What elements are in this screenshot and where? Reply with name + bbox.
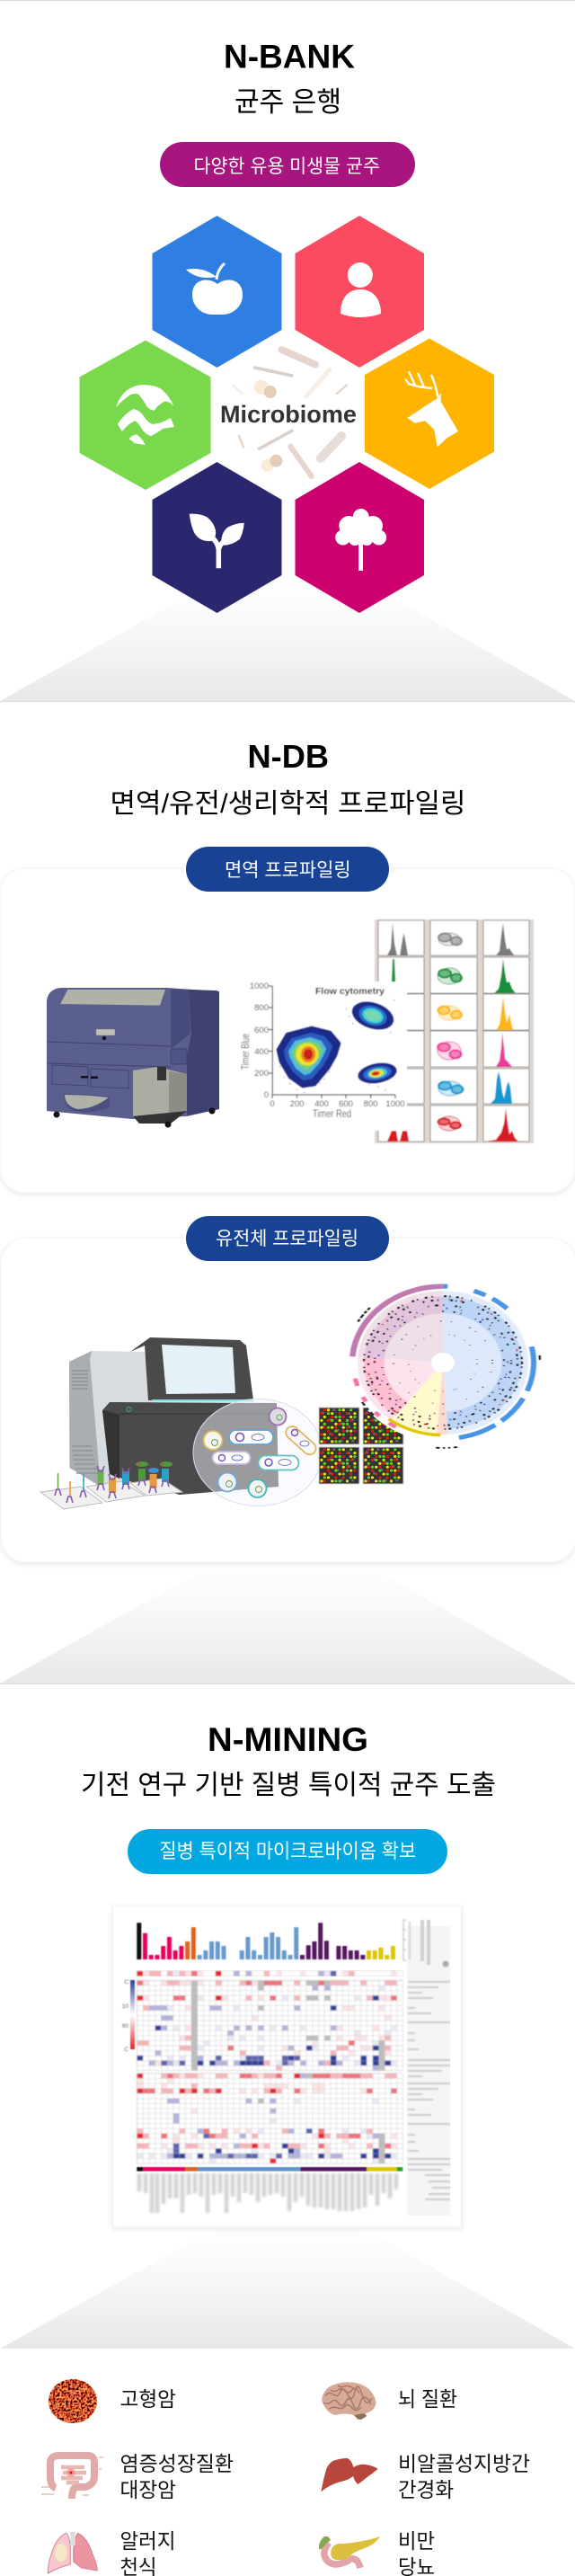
chart: histogram and contour panels	[375, 919, 534, 1143]
hexagon: animal, deer icon	[365, 338, 494, 489]
legend: colour scale: C	[124, 1979, 128, 1985]
icon: brain	[322, 2382, 376, 2420]
illustration: flow cytometer instrument	[47, 988, 219, 1127]
label: obesity, diabetes	[398, 2529, 435, 2576]
icon: intestine	[41, 2452, 103, 2499]
chart: top annotation row	[137, 1971, 402, 1976]
hexagon: forest, tree icon	[295, 462, 424, 613]
chart: flow cytometry scatter plot: Timer Red	[313, 1109, 351, 1120]
label: solid cancer: 고형암	[120, 2387, 176, 2411]
pill: disease specific microbiome	[128, 1829, 447, 1874]
hexagon: food, apple icon	[153, 216, 282, 368]
funnel: N-BANK to N-DB	[0, 580, 575, 702]
card background	[0, 868, 575, 1193]
chart: flow cytometry scatter plot: 1000	[385, 1099, 405, 1109]
top rule	[0, 0, 575, 1]
pill: disease specific microbiome: 질병 특이적 마이크로바이옴 확보	[160, 1840, 416, 1862]
icon: pancreas	[319, 2536, 381, 2568]
label: IBD, colon cancer: 대장암	[120, 2478, 176, 2501]
chart: flow cytometry scatter plot: 400	[314, 1099, 329, 1109]
label: brain disease: 뇌 질환	[398, 2387, 457, 2411]
chart: flow cytometry scatter plot: 600	[254, 1026, 269, 1035]
panel: genome profiling card	[0, 1216, 575, 1684]
panel: N-DB section header	[110, 738, 465, 819]
chart: flow cytometry scatter plot: Flow cytometry	[315, 986, 385, 997]
icon: liver	[321, 2458, 378, 2492]
legend: colour scale: 10	[122, 2003, 128, 2010]
chart: heatmap upper	[137, 1980, 402, 2071]
subheading: strain bank: 균주 은행	[234, 86, 341, 118]
chart: microbe abundance bars	[139, 1923, 393, 1959]
label: IBD, colon cancer: 염증성장질환	[120, 2452, 234, 2475]
pill: immune profiling	[186, 847, 389, 892]
chart: flow cytometry scatter plot: 600	[339, 1099, 353, 1109]
funnel: N-MINING to disease list	[0, 2227, 575, 2349]
label: IBD, colon cancer	[120, 2452, 234, 2501]
label: allergy, asthma	[120, 2529, 176, 2576]
subheading: profiling: 면역/유전/생리학적 프로파일링	[110, 789, 465, 819]
heading: N-MINING: N-MINING	[208, 1721, 368, 1758]
legend: colour scale: 90	[122, 2023, 128, 2030]
panel: N-BANK section	[0, 38, 575, 702]
funnel: N-DB to N-MINING	[0, 1562, 575, 1684]
chart: microarray chips	[319, 1408, 403, 1484]
chart: flow cytometry scatter plot: 0	[270, 1099, 275, 1109]
label: obesity, diabetes: 비만	[398, 2529, 435, 2553]
hexagon: water, waves icon	[79, 341, 210, 490]
chart: side label column	[407, 1926, 450, 2216]
panel: immune profiling card	[0, 847, 575, 1193]
label: NAFLD, cirrhosis: 간경화	[398, 2478, 454, 2501]
legend: colour scale: C	[124, 2047, 128, 2053]
chart: blurred column labels	[139, 2173, 396, 2213]
label: Microbiome: Microbiome	[220, 401, 357, 428]
chart: flow cytometry scatter plot: 1000	[250, 982, 269, 991]
chart: flow cytometry scatter plot: Timer Blue	[241, 1034, 252, 1070]
chart: flow cytometry scatter plot: 800	[254, 1003, 269, 1013]
pill: useful microbe strains	[160, 142, 415, 187]
chart: group colour bar	[137, 2167, 402, 2172]
panel: disease list	[41, 2379, 530, 2576]
label: allergy, asthma: 알러지	[120, 2529, 176, 2553]
label: NAFLD, cirrhosis: 비알콜성지방간	[398, 2452, 530, 2475]
chart: flow cytometry scatter plot: 400	[254, 1047, 269, 1057]
hexagon: plant, sprout icon	[153, 462, 282, 613]
chart: flow cytometry scatter plot: 800	[364, 1099, 378, 1109]
card background	[1, 1239, 575, 1562]
pill: genome profiling: 유전체 프로파일링	[216, 1229, 358, 1249]
heading: N-DB: N-DB	[248, 738, 329, 775]
card: heatmap figure	[113, 1905, 461, 2227]
chart: bar axis	[403, 1920, 449, 1967]
legend: colour scale	[122, 1979, 135, 2053]
subheading: literature based strain discovery: 기전 연구 기반 질병 특이적 균주 도출	[81, 1771, 496, 1800]
chart: flow cytometry scatter plot: 200	[290, 1099, 304, 1109]
chart: flow cytometry scatter plot: 0	[264, 1090, 269, 1100]
chart: flow cytometry scatter plot	[241, 982, 407, 1131]
illustration: sequencing instrument	[69, 1337, 279, 1495]
chart: flow cytometry scatter plot: 200	[254, 1069, 269, 1079]
chart: circular genome plot	[319, 1258, 567, 1467]
illustration: magnifier with bacteria	[193, 1399, 323, 1506]
hexagon: human, person icon	[295, 216, 424, 368]
pill: genome profiling	[186, 1216, 389, 1261]
pill: useful microbe strains: 다양한 유용 미생물 균주	[194, 156, 380, 177]
panel: N-MINING section	[0, 1721, 575, 2349]
icon: lungs	[48, 2532, 97, 2573]
label: NAFLD, cirrhosis	[398, 2452, 530, 2501]
pill: immune profiling: 면역 프로파일링	[225, 860, 351, 881]
chart: heatmap lower	[137, 2074, 402, 2163]
illustration: microbes behind the centre label	[233, 350, 347, 476]
icon: tumour	[49, 2379, 97, 2423]
heading: N-BANK: N-BANK	[224, 38, 355, 76]
illustration: slides with probes	[40, 1461, 182, 1509]
